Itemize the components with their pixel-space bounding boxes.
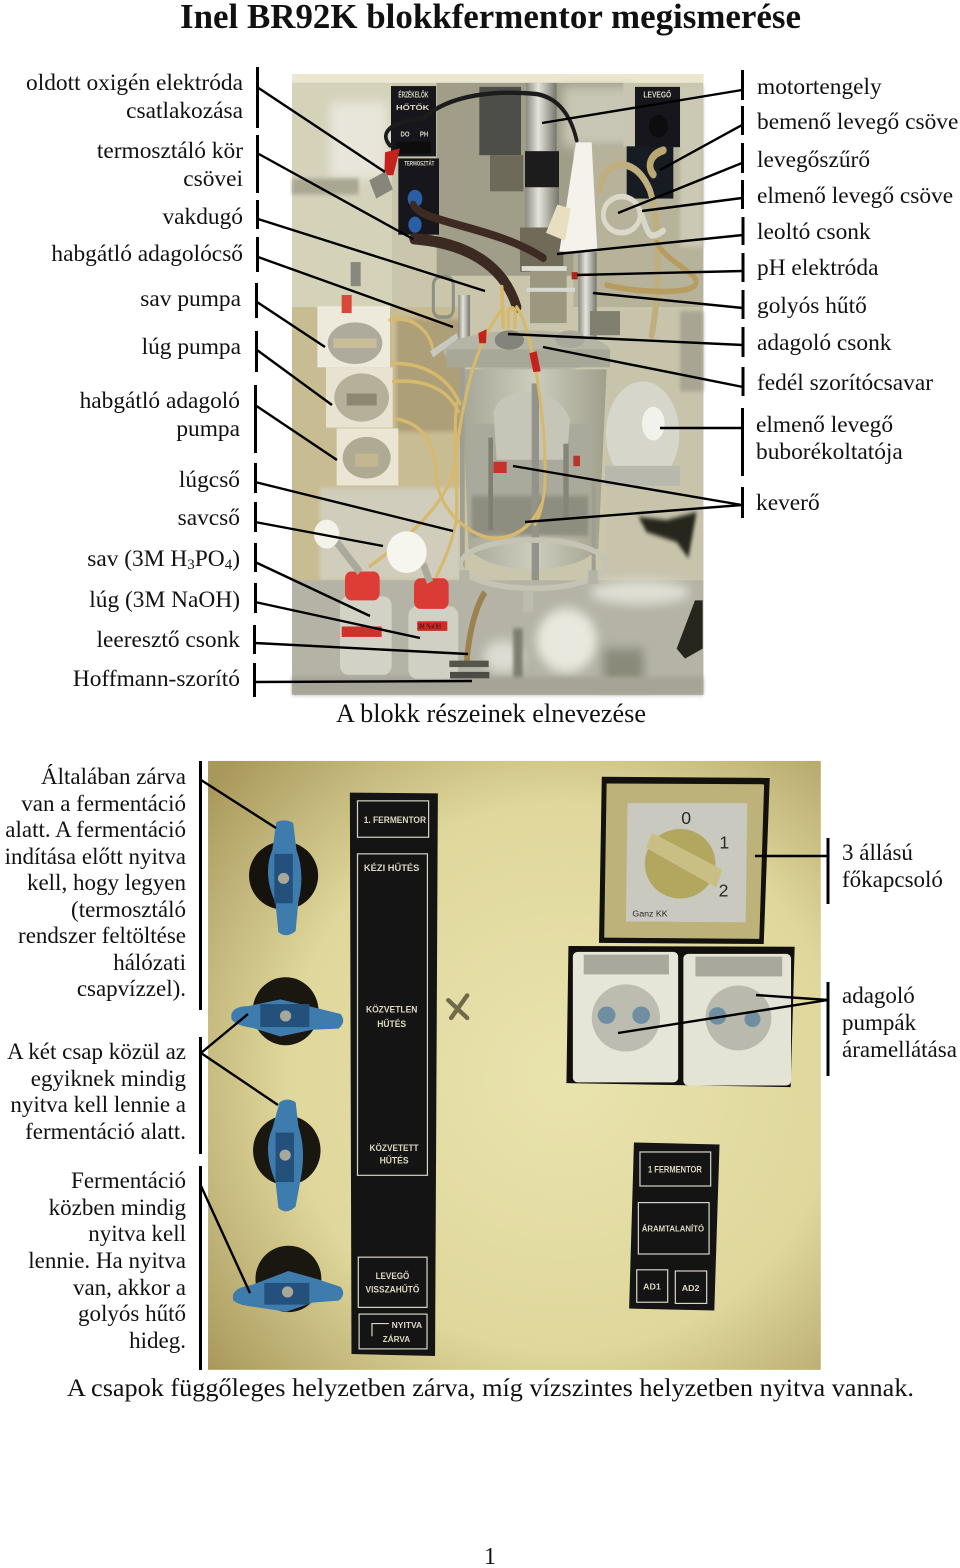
label: keverő: keverő [756,490,820,516]
mark: X [448,995,467,1018]
note: last valve: nyitva kell [88,1221,186,1246]
label: vakdugó [162,200,485,291]
motor shaft [520,83,563,272]
label: lúgcső [179,463,453,531]
label: elmenő levegő csöve [642,180,953,211]
main switch: Ganz KK [632,908,668,918]
note: first valve: kell, hogy legyen [27,870,186,895]
label: oldott oxigén elektróda [26,67,385,172]
main switch [599,777,770,944]
note: last valve: közben mindig [49,1195,186,1220]
label: sav (3M H3PO4): ) [232,546,240,572]
label: lúgcső: lúgcső [179,467,240,493]
white cone [559,142,597,252]
label: leoltó csonk: leoltó csonk [757,219,871,245]
label: lúg pumpa [142,331,332,405]
label: leoltó csonk [557,217,871,254]
label: savcső: savcső [178,505,240,531]
note: first valve: rendszer feltöltése [18,923,186,948]
label: bemenő levegő csöve: bemenő levegő csöve [757,109,958,135]
label: adagoló pumpák áramellátása: áramellátása [842,1037,957,1062]
panel: cooling labels [350,793,438,1356]
control panels: PH [420,131,428,138]
label: 3 állású főkapcsoló: 3 állású [842,840,913,865]
note: first valve: csapvízzel). [77,976,186,1001]
peristaltic pumps [317,262,398,485]
control panels [391,86,680,235]
label: Hoffmann-szorító: Hoffmann-szorító [73,666,240,692]
label: sav (3M H3PO4): 4 [225,557,233,573]
silicone tubes [370,287,545,576]
photo: fermentor block [292,74,703,728]
label: habgátló adagolócső: habgátló adagolócső [51,241,243,267]
cables and tubes [386,93,696,335]
label: termosztáló kör csövei: termosztáló kör [97,138,243,164]
right labels: block parts [508,70,958,522]
label: golyós hűtő [593,290,867,319]
panel: cooling labels: KÉZI HŰTÉS [364,862,419,874]
left labels: block parts [26,67,485,697]
panel: cooling labels: LEVEGŐ [376,1270,410,1282]
label: lúg (3M NaOH) [89,583,420,638]
label: sav (3M H3PO4) [87,543,370,616]
panel: cooling labels: KÖZVETETT [370,1143,419,1154]
control panels: DO [401,131,409,138]
panel: cooling labels: KÖZVETLEN [366,1004,417,1015]
panel: cooling labels: NYITVA [392,1320,423,1330]
pump power sockets [566,946,795,1087]
note: first valve: alatt. A fermentáció [5,817,186,842]
note: first valve: Általában zárva [41,764,186,789]
note: last valve: hideg. [129,1328,186,1353]
label: adagoló csonk: adagoló csonk [757,330,892,356]
caption: photo 1: A blokk részeinek elnevezése [336,699,646,728]
note: two valves: egyiknek mindig [31,1066,186,1091]
note: two valves [7,1014,278,1154]
cooling valve 1 [249,820,318,935]
label: habgátló adagoló pumpa: pumpa [176,416,241,442]
bottles: 3M NaOH [417,623,441,631]
photo: control panel [67,761,914,1402]
label: oldott oxigén elektróda: oldott oxigén elektróda [26,70,244,96]
label: habgátló adagoló pumpa: habgátló adagoló [80,388,240,414]
panel: pump switches [629,1142,720,1311]
control panels: HŐTŐK [396,103,430,112]
label: pH elektróda [577,253,879,282]
note: first valve: indítása előtt nyitva [5,844,186,869]
note: two valves: nyitva kell lennie a [10,1092,186,1117]
note: first valve: (termosztáló [71,897,186,922]
dark column behind the motor [479,87,521,155]
label: lúg (3M NaOH): lúg (3M NaOH) [89,587,240,613]
note: two valves: A két csap közül az [7,1039,186,1064]
label: lúg pumpa: lúg pumpa [142,334,242,360]
label: adagoló pumpák áramellátása: adagoló [842,983,915,1008]
label: leeresztő csonk [96,625,468,654]
note: two valves: fermentáció alatt. [25,1119,186,1144]
label: savcső [178,502,383,546]
bottles [314,520,458,679]
label: pH elektróda: pH elektróda [757,255,879,281]
black stand parts [638,512,703,659]
control panels: TERMOSZTÁT [404,160,435,168]
label: fedél szorítócsavar [543,347,933,396]
label: fedél szorítócsavar: fedél szorítócsavar [757,370,933,396]
panel: pump switches: ÁRAMTALANÍTÓ [642,1223,704,1233]
label: sav (3M H3PO4): 3 [187,557,195,573]
panel: pump switches: 1 FERMENTOR [648,1165,702,1176]
label: habgátló adagoló pumpa [80,385,337,460]
note: first valve [5,761,276,1010]
label: adagoló csonk [508,327,892,357]
note: last valve: Fermentáció [71,1168,186,1193]
label: adagoló pumpák áramellátása [618,982,957,1076]
label: levegőszűrő: levegőszűrő [757,147,870,173]
note: last valve: golyós hűtő [78,1301,186,1326]
note: last valve: van, akkor a [73,1275,186,1300]
main switch: 2 [719,881,728,901]
condenser and probes [433,247,620,343]
label: oldott oxigén elektróda: csatlakozása [126,98,244,124]
label: elmenő levegő buborékoltatója [660,408,903,476]
label: sav pumpa [140,283,325,347]
cooling valve 3 [253,1100,321,1211]
label: vakdugó: vakdugó [162,204,243,230]
label: sav (3M H3PO4): PO [195,546,225,572]
label: leeresztő csonk: leeresztő csonk [96,627,240,653]
control panels: LEVEGŐ [643,90,671,99]
label: bemenő levegő csöve [660,106,958,170]
label: termosztáló kör csövei [97,135,413,239]
panel: pump switches: AD1 [643,1282,661,1292]
base ring [459,540,606,612]
cooling valve 2 [231,977,343,1045]
label: 3 állású főkapcsoló: főkapcsoló [842,867,943,892]
round glass flask [606,381,679,486]
panel: pump switches: AD2 [682,1283,700,1293]
label: termosztáló kör csövei: csövei [183,166,243,192]
label: keverő [513,466,820,522]
label: 3 állású főkapcsoló [755,838,943,904]
label: adagoló pumpák áramellátása: pumpák [842,1010,917,1035]
main switch: 1 [719,833,729,853]
panel: cooling labels: HŰTÉS [377,1018,406,1030]
note: first valve: hálózati [113,950,186,975]
label: golyós hűtő: golyós hűtő [757,293,867,319]
panel: cooling labels: VISSZAHŰTŐ [366,1284,420,1296]
panel: cooling labels: 1. FERMENTOR [364,815,426,826]
label: levegőszűrő [618,143,870,213]
note: last valve [28,1166,250,1370]
label: sav (3M H3PO4): sav (3M H [87,546,187,572]
label: sav pumpa: sav pumpa [140,286,242,312]
label: elmenő levegő csöve: elmenő levegő csöve [757,183,953,209]
panel: cooling labels: HŰTÉS [380,1155,409,1166]
label: elmenő levegő buborékoltatója: elmenő levegő [756,412,893,438]
cooling valve 4 [233,1246,343,1312]
label: motortengely: motortengely [757,74,882,100]
drain tube and Hoffmann clamp [449,592,489,678]
control panels: ÉRZÉKELŐK [398,90,429,99]
label: habgátló adagolócső [51,237,453,327]
top plate [443,330,610,372]
main switch: 0 [681,808,691,828]
note: first valve: van a fermentáció [21,791,186,816]
label: motortengely [542,70,882,123]
panel: cooling labels: ZÁRVA [383,1333,411,1344]
label: elmenő levegő buborékoltatója: buborékoltatója [756,439,903,465]
caption: photo 2: A csapok függőleges helyzetben zárva, míg vízszintes helyzetben nyitva vannak. [67,1375,914,1402]
red tube clips [384,148,541,372]
note: last valve: lennie. Ha nyitva [28,1248,186,1273]
glass vessel [460,367,607,580]
